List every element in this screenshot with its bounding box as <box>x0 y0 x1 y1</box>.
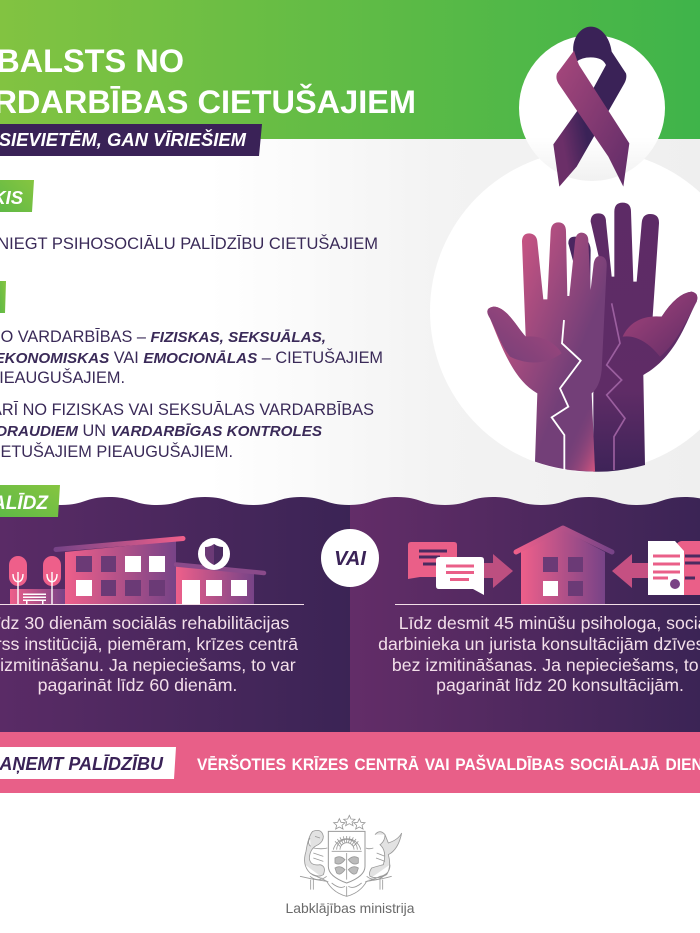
tag: mērķis <box>0 180 34 212</box>
shield <box>328 831 365 883</box>
pink call-to-action band <box>0 732 700 793</box>
icon: shield <box>198 538 230 570</box>
text: consultations: pagarināt līdz 20 konsultācijām. <box>436 675 684 695</box>
target group text: EKONOMISKAS VAI EMOCIONĀLAS – CIETUŠAJIEM <box>0 348 383 367</box>
griffin <box>365 832 402 882</box>
text: rehabilitation <box>0 613 298 695</box>
left hand <box>487 222 607 472</box>
logo: coat of arms <box>300 815 402 896</box>
lion <box>305 830 328 882</box>
badge: VAI <box>321 529 379 587</box>
badge: VAI: VAI <box>334 548 366 570</box>
tag: how to get help <box>0 747 176 779</box>
large white circle <box>430 150 700 472</box>
arrow: right <box>484 554 513 588</box>
subtitle bar <box>0 124 262 156</box>
icon: chat bubbles <box>408 542 484 595</box>
illustration: home consultations <box>395 528 700 604</box>
illustration: ribbon and hands <box>430 27 700 472</box>
illustration: crisis centre building <box>0 538 304 604</box>
icon: ribbon <box>553 27 629 187</box>
right hand <box>568 203 697 472</box>
small white circle <box>519 35 665 181</box>
text: consultations <box>378 613 700 695</box>
tag: palīdz <box>0 485 60 517</box>
icon: documents <box>648 541 700 595</box>
arrow: left <box>612 554 650 588</box>
target group text: DRAUDIEM UN VARDARBĪGAS KONTROLES <box>0 422 322 440</box>
tag: kam <box>0 281 6 313</box>
icon: hands <box>487 203 697 472</box>
header band <box>0 0 700 139</box>
main building <box>56 538 183 604</box>
side wing <box>176 563 264 604</box>
purple panels with wavy top <box>0 490 700 733</box>
title <box>0 43 416 120</box>
page background <box>0 139 700 509</box>
target group text <box>0 328 383 461</box>
oak base <box>300 876 392 896</box>
text: rehabilitation: pagarināt līdz 60 dienām. <box>38 675 237 695</box>
logo text: Labklājības ministrija <box>286 900 415 916</box>
target group text: ARĪ NO FIZISKAS VAI SEKSUĀLAS VARDARBĪBAS <box>0 401 374 419</box>
stars <box>334 815 365 829</box>
house <box>516 528 612 604</box>
icon: bench <box>23 594 46 604</box>
icon: trees <box>9 556 61 604</box>
